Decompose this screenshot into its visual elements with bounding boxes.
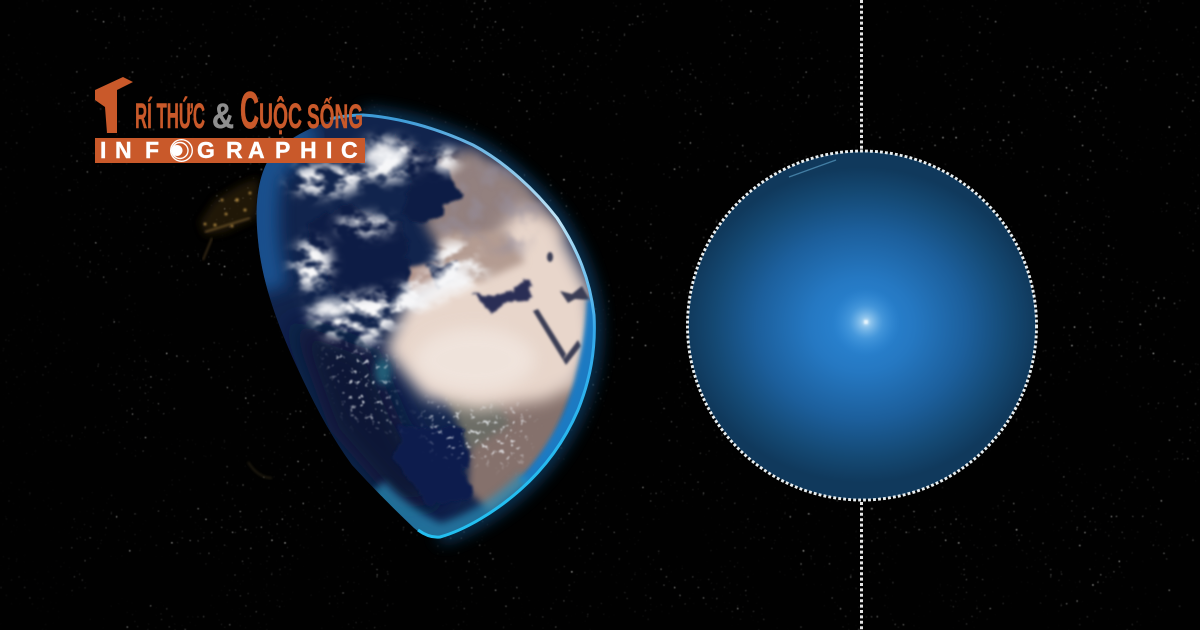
logo roof T mark <box>95 77 133 133</box>
left atmosphere <box>262 125 310 290</box>
sphere body <box>688 152 1036 500</box>
land mottling <box>436 154 544 256</box>
logo title: sống: SỐNG <box>307 97 363 136</box>
sahara highlight <box>415 328 535 392</box>
earth globe <box>256 116 593 536</box>
core point <box>864 320 868 324</box>
night side city lights <box>200 178 272 478</box>
earth glow <box>363 115 594 537</box>
banner text right: GRAPHIC <box>197 137 358 163</box>
logo title: big C: C <box>240 82 259 140</box>
banner target icon <box>171 140 192 161</box>
lower atmosphere haze <box>375 482 530 537</box>
blue sphere <box>688 151 1036 500</box>
bright core <box>832 288 900 356</box>
logo <box>95 77 365 163</box>
night-side ocean darkening <box>290 320 450 510</box>
logo ampersand: & <box>212 97 234 136</box>
ocean base <box>256 116 582 536</box>
dotted vertical line bottom <box>860 502 863 630</box>
streak <box>789 160 836 177</box>
narrow seas <box>533 252 590 365</box>
logo title: Cuộc remainder: UỘC <box>259 96 302 136</box>
cloud specks <box>325 350 530 465</box>
dotted outline <box>688 151 1036 500</box>
clouds <box>287 138 490 345</box>
logo banner <box>95 138 365 163</box>
indian ocean limb <box>525 300 596 486</box>
banner text left: INF <box>100 137 159 163</box>
dark ocean and seas <box>305 135 532 505</box>
turquoise coast <box>375 359 391 385</box>
left edge darkening <box>0 0 70 630</box>
land masses <box>385 148 596 512</box>
earth bright rim <box>330 115 594 537</box>
bright cloud cores <box>312 144 470 318</box>
logo: RÍ THỨC <box>135 96 205 136</box>
dotted vertical line top <box>860 0 863 150</box>
